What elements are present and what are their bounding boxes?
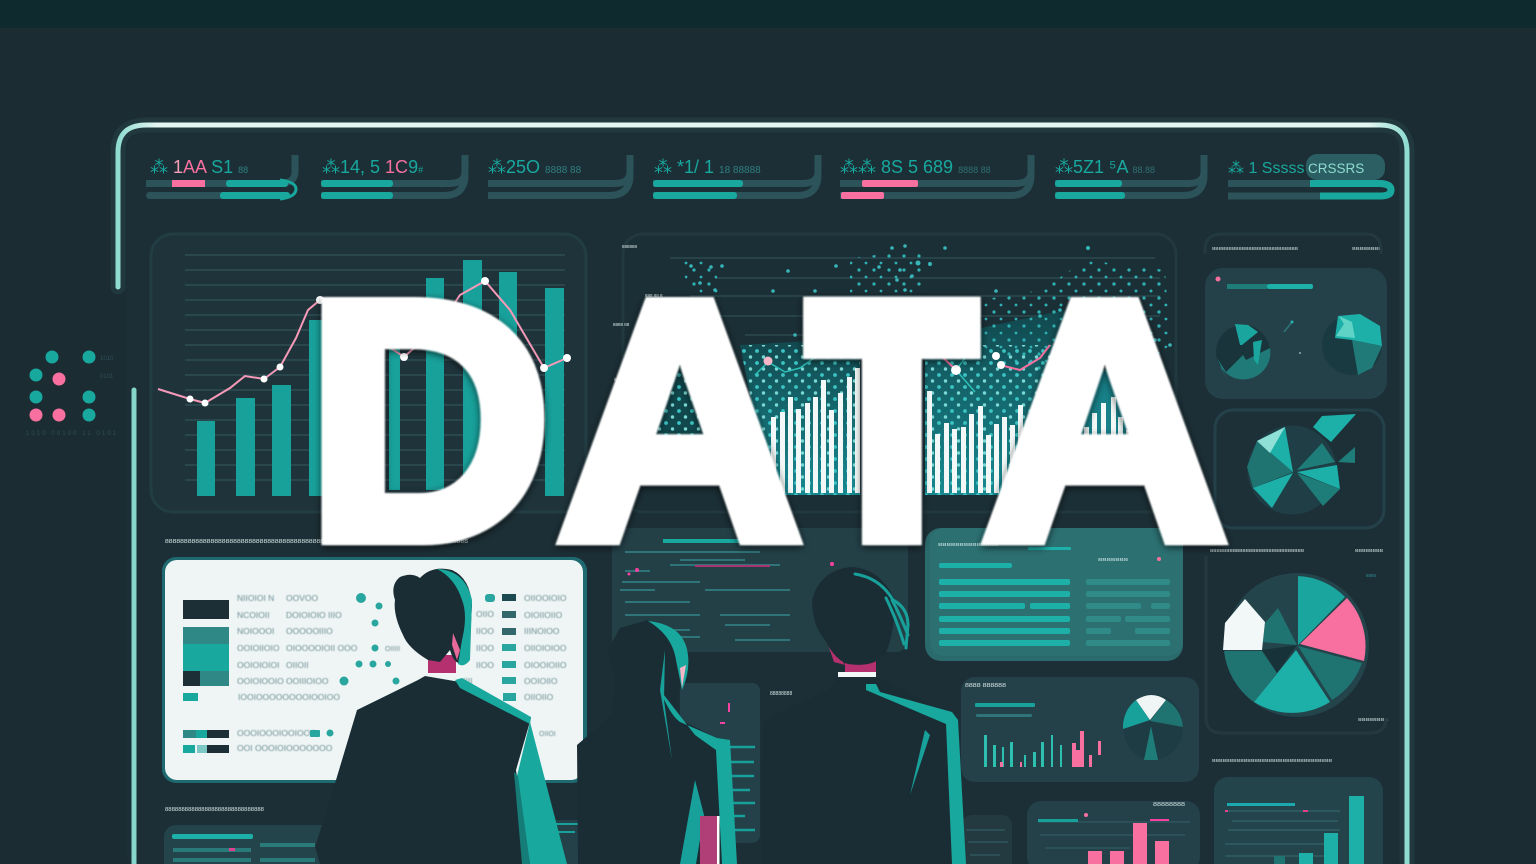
person: ponytail woman at right — [761, 567, 966, 864]
chart bars — [197, 260, 564, 496]
right column captions — [1210, 246, 1389, 763]
whiteboard table text: OOI OOOIOIOOOOOOO — [237, 743, 333, 753]
axis labels: 888 88 8 — [645, 293, 663, 298]
scatter density areas — [680, 250, 1165, 345]
whiteboard table text: IIOO — [476, 643, 494, 653]
pink trend line — [158, 281, 567, 403]
whiteboard table text: NOIOOOI — [237, 626, 274, 636]
lower mid caption: 88888888 — [1153, 802, 1185, 808]
whiteboard table text: OIOOOOIOII OOO — [286, 643, 358, 653]
whiteboard table text: IIINOIOO — [524, 626, 560, 636]
title: DATA: T — [811, 240, 973, 601]
white bars — [695, 368, 1131, 493]
KPI strip 3: ⁂25O 8888 88 — [488, 157, 582, 177]
KPI strip 2: ⁂14, 5 1C9# — [322, 157, 423, 177]
hair highlight — [648, 621, 688, 690]
scattered points — [689, 244, 1172, 347]
whiteboard table text: OOVOO — [286, 593, 319, 603]
bright teal wedge — [1254, 650, 1330, 713]
whiteboard table text: OOOIOOOIOOIOOO — [237, 728, 317, 738]
person: bun woman in foreground — [315, 569, 567, 864]
teal panel caption: 88888888888888 — [938, 542, 999, 547]
whiteboard table text: OIIOI — [539, 731, 556, 738]
title: DATA: D — [306, 231, 552, 611]
left side dot legend: 0101 — [100, 374, 114, 380]
two pie panel — [1205, 268, 1387, 399]
neck — [845, 655, 876, 672]
left side dot legend — [26, 350, 117, 437]
mini bars — [984, 735, 1062, 767]
axis labels: 8888 — [614, 377, 625, 382]
chart gridlines — [185, 255, 565, 480]
mini bar and pie panel — [961, 677, 1199, 782]
left side dot legend: 1010 00100 11 0101 — [26, 431, 117, 437]
small panel bottom center — [962, 815, 1012, 864]
mini panel caption: 8888 888888 — [965, 683, 1006, 689]
inner teal wedge — [1263, 608, 1297, 645]
whiteboard table text: OIIOIOIOO — [524, 643, 567, 653]
panel behind women — [680, 683, 792, 843]
whiteboard table text: NCOIOII — [237, 610, 270, 620]
torso silhouette — [315, 676, 531, 864]
white wedge — [1223, 599, 1265, 650]
whiteboard dots and chips — [310, 593, 516, 737]
hair teal strands — [855, 574, 908, 648]
pink wedge — [1300, 598, 1366, 661]
mini pie chart — [1123, 694, 1183, 760]
head — [812, 567, 895, 665]
whiteboard table text: OIIOII — [286, 660, 309, 670]
lower mid panel — [1027, 801, 1200, 864]
axis labels: 888888 — [622, 244, 638, 249]
KPI strip 5: ⁂⁂ 8S 5 689 8888 88 — [840, 157, 991, 177]
person: left woman with long hair — [577, 620, 737, 864]
hair teal highlight — [437, 569, 472, 665]
head and bun — [393, 569, 472, 664]
whiteboard table text: OIOIIOIIO — [524, 610, 563, 620]
left side dot legend: 1010 — [100, 356, 114, 362]
right column captions: 88888888 — [1358, 717, 1389, 722]
KPI strip 7: CRSSRS — [1308, 161, 1364, 176]
jacket teal edge — [455, 678, 531, 724]
trend line points — [186, 277, 571, 406]
KPI strip 6: ⁂5Z1 ⁵A 88.88 — [1055, 157, 1155, 177]
title: DATA — [306, 231, 1228, 611]
scatter gridlines — [670, 258, 1160, 335]
whiteboard table text: IIOO — [476, 660, 494, 670]
whiteboard swatches — [183, 600, 229, 753]
KPI strip 4 — [653, 155, 818, 199]
exploded pie panel — [1215, 410, 1384, 528]
KPI strip 2 — [321, 155, 465, 199]
title: DATA: A — [557, 231, 803, 611]
small pie left — [1216, 324, 1270, 379]
jacket teal edge — [866, 684, 966, 864]
axis labels — [613, 244, 663, 382]
whiteboard table text: OOIOIOIOI — [237, 660, 280, 670]
lower-left wedge — [1224, 651, 1277, 702]
center dim data panel — [612, 528, 908, 652]
whiteboard table text: OIIIII — [385, 646, 400, 653]
right column captions: 88888888888888888888888888 — [1212, 246, 1299, 251]
whiteboard table text: OIIOOIOIO — [524, 593, 567, 603]
right column captions: 8888888888888888888888888888888888 — [1212, 758, 1333, 763]
caption: 88888888 — [770, 691, 792, 697]
whiteboard table text: OIOOIOIIO — [524, 660, 567, 670]
whiteboard table text: OOIOIOOIO — [237, 676, 284, 686]
left bar and line chart panel — [151, 234, 586, 512]
lower left data panel — [164, 825, 404, 864]
teal panel bars — [939, 547, 1071, 646]
caption above lower-left panel: 888888888888888888888888888888 — [165, 807, 264, 813]
right column captions: 88888888 — [1352, 246, 1383, 251]
dark teal wedge — [1298, 646, 1362, 700]
pie note: 8888 — [1366, 573, 1377, 578]
large pie panel — [1206, 556, 1386, 733]
right column captions: 88888888 — [1355, 548, 1384, 553]
whiteboard table text: OOIIIOIOO — [286, 676, 329, 686]
right column top outline — [1205, 234, 1381, 254]
caption above whiteboard: 88888888888888888888888888888888888888888888888888888888888888888888888888888888 — [165, 539, 468, 545]
teal wedge — [1298, 576, 1345, 645]
whiteboard table text: OOIOIIO — [524, 676, 558, 686]
axis labels: 8888 88 — [613, 322, 630, 327]
pink neck — [428, 655, 456, 673]
network line with highlights — [755, 345, 1050, 392]
whiteboard table text: IOOIOOOOOOOOIOOIOO — [238, 692, 340, 702]
top band — [0, 0, 1536, 28]
whiteboard table text: OOIOIIOIO — [237, 643, 280, 653]
whiteboard table text: NIIOIOI N — [237, 593, 274, 603]
KPI strip 7 — [1228, 154, 1391, 196]
whiteboard table text: OIIO — [476, 609, 494, 619]
whiteboard table text — [237, 593, 567, 753]
teal list panel — [925, 528, 1183, 661]
dashboard frame — [118, 125, 1407, 864]
torso silhouette — [761, 677, 964, 864]
inner dark wedge — [1262, 645, 1297, 673]
whiteboard table text: DOIOIOIO IIIO — [286, 610, 342, 620]
KPI strip 5 — [840, 155, 1031, 199]
center scatter and bar chart panel — [613, 234, 1176, 512]
right column captions: 88888888888888888888888888888 — [1210, 548, 1305, 553]
whiteboard table text: OIIOIIO — [524, 692, 554, 702]
whiteboard table text: IIOO — [476, 626, 494, 636]
KPI strip 6 — [1055, 155, 1204, 199]
whiteboard table text: IIII — [463, 676, 472, 686]
KPI strip 1 — [146, 155, 296, 199]
KPI strip 3 — [488, 155, 630, 196]
whiteboard panel — [162, 557, 587, 783]
KPI strip 4: ⁂ *1/ 1 18 88888 — [654, 157, 761, 177]
whiteboard table text: OOOOOIIIO — [286, 626, 333, 636]
lower panel bars behind man — [552, 820, 584, 864]
small pie right — [1322, 314, 1382, 375]
title: DATA: A — [982, 231, 1228, 611]
KPI strip 7: ⁂ 1 Sssss — [1228, 160, 1304, 177]
KPI strip 1: ⁂ 1AA S1 88 — [150, 157, 248, 177]
bottom right bar panel — [1214, 777, 1383, 864]
teal list panel: 8888888 — [1098, 557, 1129, 562]
